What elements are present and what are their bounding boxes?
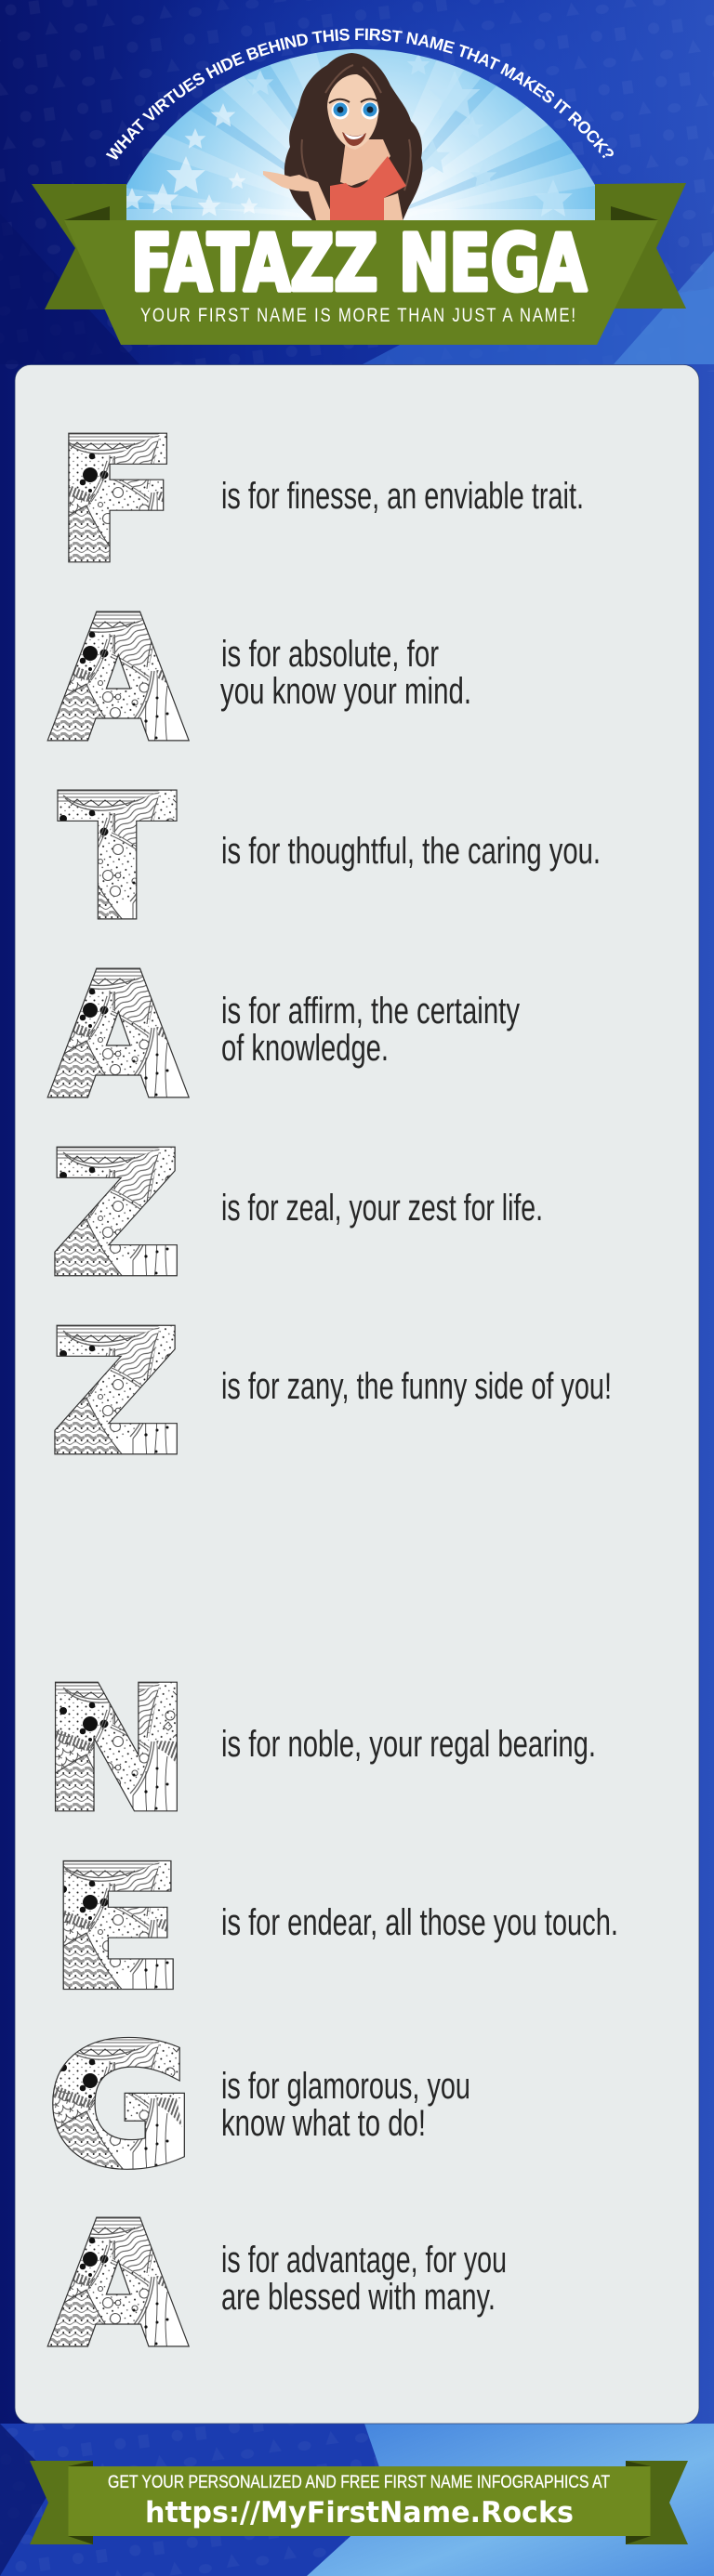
eyes: [329, 99, 379, 119]
text A: you know your mind.: [220, 671, 471, 712]
text G: know what to do!: [221, 2103, 426, 2144]
row: A3: [46, 2217, 506, 2347]
letter E: E: [49, 1832, 183, 2026]
letter A: A: [52, 582, 184, 776]
text A3: are blessed with many.: [221, 2277, 496, 2318]
text Z: is for zeal, your zest for life.: [221, 1188, 543, 1229]
text A3: [221, 2240, 507, 2318]
character illustration: [263, 53, 423, 223]
letter Z: Z: [50, 1296, 181, 1491]
mouth: [342, 132, 366, 146]
shirt: [330, 156, 406, 223]
row: N: [33, 1653, 596, 1847]
ribbon tail left: [32, 184, 126, 309]
row: T: [33, 762, 601, 955]
row: G: [33, 2011, 470, 2202]
text A2: of knowledge.: [221, 1028, 389, 1069]
neck and chest: [340, 139, 390, 186]
text G: is for glamorous, you: [221, 2066, 470, 2107]
row: A: [33, 582, 471, 776]
row: F: [33, 403, 584, 598]
footer url: https://MyFirstName.Rocks: [145, 2496, 574, 2530]
title: FATAZZ NEGA: [131, 217, 587, 309]
row: Z: [33, 1118, 543, 1312]
face: [327, 74, 378, 150]
ribbon main: [64, 220, 658, 345]
text A: is for absolute, for: [221, 634, 439, 675]
footer band: [69, 2466, 651, 2536]
text A: [220, 634, 471, 712]
footer line: GET YOUR PERSONALIZED AND FREE FIRST NAME INFOGRAPHICS AT: [108, 2473, 610, 2492]
letter T: [33, 762, 200, 955]
text G: [221, 2066, 470, 2144]
subtitle: YOUR FIRST NAME IS MORE THAN JUST A NAME!: [140, 305, 575, 327]
letter N: N: [43, 1653, 190, 1847]
hair: [284, 53, 423, 223]
letter G: G: [47, 2011, 193, 2202]
letter A: [46, 2217, 190, 2347]
footer ribbon: [30, 2461, 688, 2544]
right arm: [384, 193, 403, 220]
letter F: F: [56, 403, 178, 598]
row: A2: [33, 939, 520, 1133]
footer tail left: [30, 2461, 93, 2544]
panel: virtues: [15, 364, 699, 2424]
footer folds: [68, 2461, 651, 2544]
row: Z2: [33, 1296, 612, 1491]
header dome with rays and stars: [126, 48, 595, 220]
text A3: is for advantage, for you: [221, 2240, 507, 2280]
letter A: A: [52, 2188, 184, 2382]
footer tail right: [626, 2461, 688, 2544]
letter A: A: [52, 939, 184, 1133]
text A2: is for affirm, the certainty: [221, 991, 520, 1032]
text A2: [221, 991, 520, 1069]
letter T: T: [60, 762, 174, 955]
row: E: [33, 1832, 618, 2026]
curved heading: WHAT VIRTUES HIDE BEHIND THIS FIRST NAME THAT MAKES IT ROCK?: [106, 28, 614, 160]
arm and hand: [263, 171, 335, 220]
ribbon tail right: [595, 183, 686, 309]
letter Z: Z: [50, 1118, 181, 1312]
text F: is for finesse, an enviable trait.: [221, 476, 584, 517]
